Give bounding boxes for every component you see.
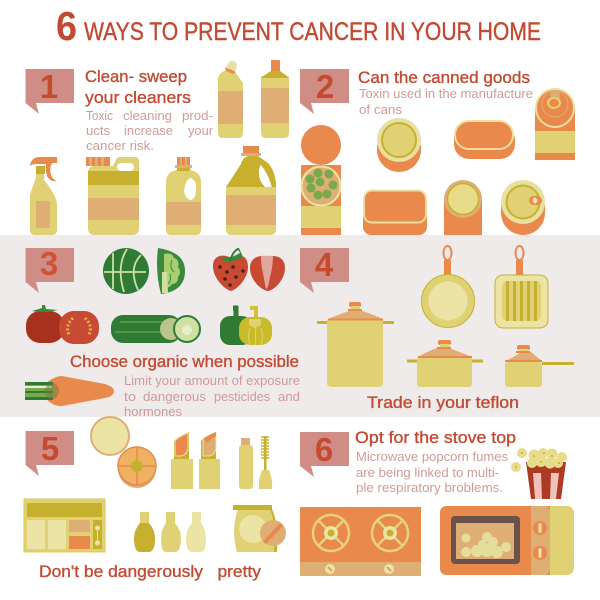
badge 6: 6: [315, 431, 333, 468]
icon: spray bottle: [30, 157, 57, 235]
icon: lipstick tan: [199, 432, 220, 489]
text 6: Microwave popcorn fumes: [356, 449, 508, 464]
icon: can with tab: [501, 180, 545, 235]
text 2: [359, 86, 533, 117]
icon: eyeshadow palette: [24, 499, 105, 552]
text 1: increase: [124, 123, 173, 138]
icon: casserole: [407, 340, 483, 387]
icon: frying pan: [422, 246, 474, 328]
icon: carrot: [25, 376, 114, 406]
icon: green pepper: [220, 308, 252, 345]
icon: jerrycan: [86, 157, 139, 235]
text 1: ucts: [86, 123, 111, 138]
icon: polish olive: [134, 512, 155, 552]
badge 2: [300, 68, 349, 114]
text 1: cleaning: [123, 108, 172, 123]
text 1: [86, 108, 214, 153]
heading 3: Choose organic when possible: [70, 353, 299, 371]
badge 3: [26, 245, 74, 293]
text 6: ple respiratory broblems.: [356, 480, 503, 495]
icon: closed can: [301, 125, 341, 205]
text 3: dangerous: [143, 389, 206, 404]
text 6: [356, 449, 508, 495]
text 2: Toxin used in the manufacture: [359, 86, 533, 101]
icon: powder with puff: [233, 505, 286, 552]
text 3: to: [124, 389, 136, 404]
badge 3: 3: [40, 245, 58, 282]
icon: compact: [91, 417, 129, 455]
icon: tomato: [26, 305, 64, 343]
icon: saucepan: [505, 345, 574, 387]
icon: round can: [377, 118, 421, 172]
panel 2: canned goods: [300, 68, 575, 235]
icon: oval tin: [454, 121, 515, 159]
badge 5: [26, 430, 74, 476]
heading 1: your cleaners: [85, 89, 191, 107]
icon: popcorn: [511, 448, 567, 499]
icon: lipstick orange: [171, 432, 193, 489]
icon: mascara tube: [239, 438, 253, 489]
text 3: pesticides: [214, 389, 270, 404]
icon: blush compact: [118, 447, 156, 488]
icon: tall can: [444, 180, 482, 235]
heading 4: Trade in your teflon: [367, 394, 519, 412]
heading 1: Clean- sweep: [85, 68, 187, 86]
icon: polish yellow: [161, 512, 181, 552]
text 1: cancer risk.: [86, 138, 154, 153]
heading 5: Don't be dangerously pretty: [39, 563, 262, 581]
icon: cucumber: [111, 315, 200, 343]
badge 4: 4: [315, 246, 334, 283]
text 3: Limit your amount of exposure: [124, 373, 300, 388]
icon: microwave: [440, 506, 574, 575]
badge 1: [26, 68, 74, 114]
icon: cabbage: [103, 248, 149, 294]
panel 3: organic: [25, 245, 300, 419]
icon: mascara wand: [259, 436, 272, 489]
badge 6: [300, 431, 349, 477]
title: [56, 3, 541, 49]
badge 4: [300, 246, 349, 293]
panel 6: stove: [300, 429, 574, 576]
badge 5: 5: [41, 430, 59, 467]
icon: tomato slice: [59, 311, 99, 344]
text 3: hormones: [124, 404, 182, 419]
title: 6: [56, 3, 77, 49]
icon: stove: [300, 507, 421, 576]
text 6: are being linked to multi-: [356, 465, 499, 480]
icon: rectangular tin: [363, 190, 427, 235]
text 3: and: [278, 389, 300, 404]
panel 1: cleaners: [26, 60, 289, 235]
icon: grill pan: [495, 246, 548, 328]
icon: strawberry: [213, 248, 248, 291]
icon: bottle tilted cap: [218, 61, 243, 138]
badge 1: 1: [40, 68, 58, 105]
icon: bleach jug: [226, 146, 276, 235]
icon: polish pale: [186, 512, 206, 552]
icon: bottle flat cap: [261, 60, 289, 138]
heading 6: Opt for the stove top: [355, 429, 516, 447]
panel 4: teflon: [300, 246, 574, 412]
text 1: your: [188, 123, 214, 138]
icon: can with ring pull: [535, 89, 575, 160]
background band: [0, 235, 600, 417]
icon: peas can: [301, 166, 341, 235]
icon: stock pot: [317, 302, 394, 387]
text 1: prod-: [182, 108, 213, 123]
text 3: [124, 373, 300, 419]
icon: cut cabbage: [157, 248, 185, 294]
panel 5: cosmetics: [24, 417, 286, 581]
text 2: of cans: [359, 102, 403, 117]
heading 1: [85, 68, 191, 107]
text 1: Toxic: [86, 108, 113, 123]
heading 2: Can the canned goods: [358, 69, 530, 87]
badge 2: 2: [316, 68, 334, 105]
icon: yellow pepper: [239, 308, 272, 345]
icon: strawberry half: [250, 256, 285, 291]
icon: detergent bottle: [166, 157, 201, 235]
